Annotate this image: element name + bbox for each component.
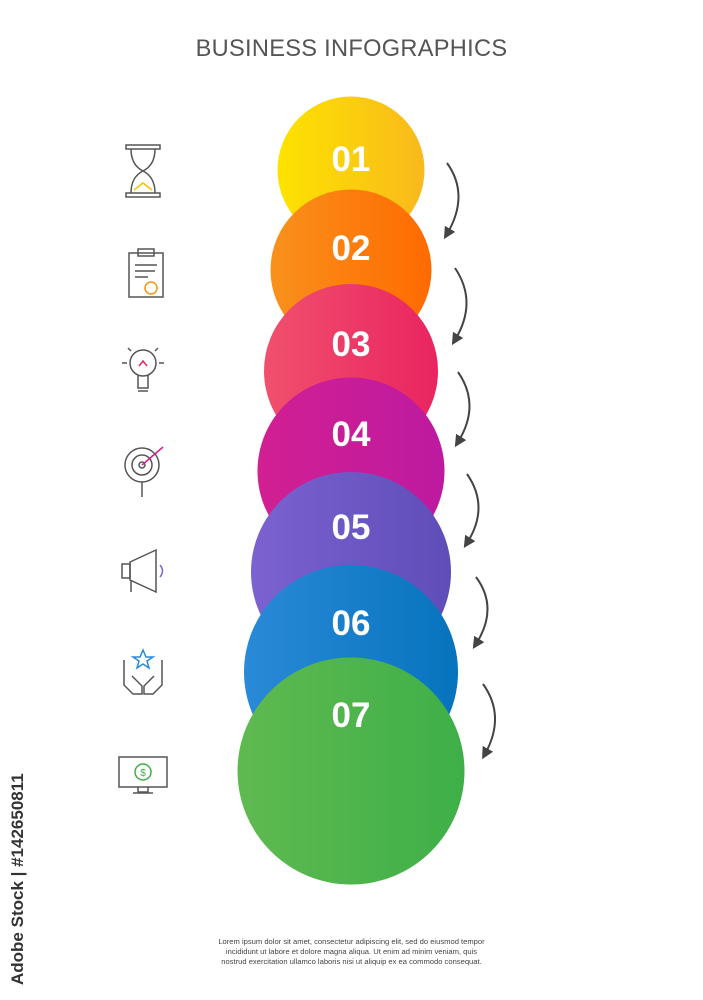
footer text: nostrud exercitation ullamco laboris nisi ut aliquip ex ea commodo consequat.: [221, 957, 482, 966]
icon: hourglass: [126, 145, 160, 197]
title: BUSINESS INFOGRAPHICS: [196, 36, 507, 62]
step 05: 05: [332, 508, 370, 547]
step 06: [244, 565, 458, 779]
footer text: incididunt ut labore et dolore magna aliqua. Ut enim ad minim veniam, quis: [226, 947, 477, 956]
step 02: 02: [332, 229, 370, 268]
step 01: 01: [332, 140, 370, 179]
step 02: [270, 190, 432, 350]
side watermark: Adobe Stock | #142650811: [8, 773, 27, 985]
icon: target: [125, 447, 163, 497]
step 04: 04: [332, 415, 371, 454]
step 05: [251, 472, 451, 672]
step 04: [258, 378, 444, 564]
icon: bulb: [122, 348, 164, 391]
icons: [119, 145, 167, 793]
footer text: Lorem ipsum dolor sit amet, consectetur adipiscing elit, sed do eiusmod tempor: [218, 937, 485, 946]
step 06: 06: [332, 604, 370, 643]
icon: monitor money: $: [140, 768, 146, 779]
icon: megaphone: [122, 550, 162, 592]
step 03: [264, 284, 438, 458]
arrows: [447, 163, 495, 754]
step 07: 07: [332, 696, 370, 735]
footer text: [218, 937, 485, 966]
icon: monitor money: [119, 757, 167, 793]
step 03: 03: [332, 325, 370, 364]
step 01: [278, 96, 424, 244]
step 07: [238, 658, 464, 884]
icon: hands with star: [124, 650, 162, 694]
icon: clipboard: [129, 249, 163, 297]
